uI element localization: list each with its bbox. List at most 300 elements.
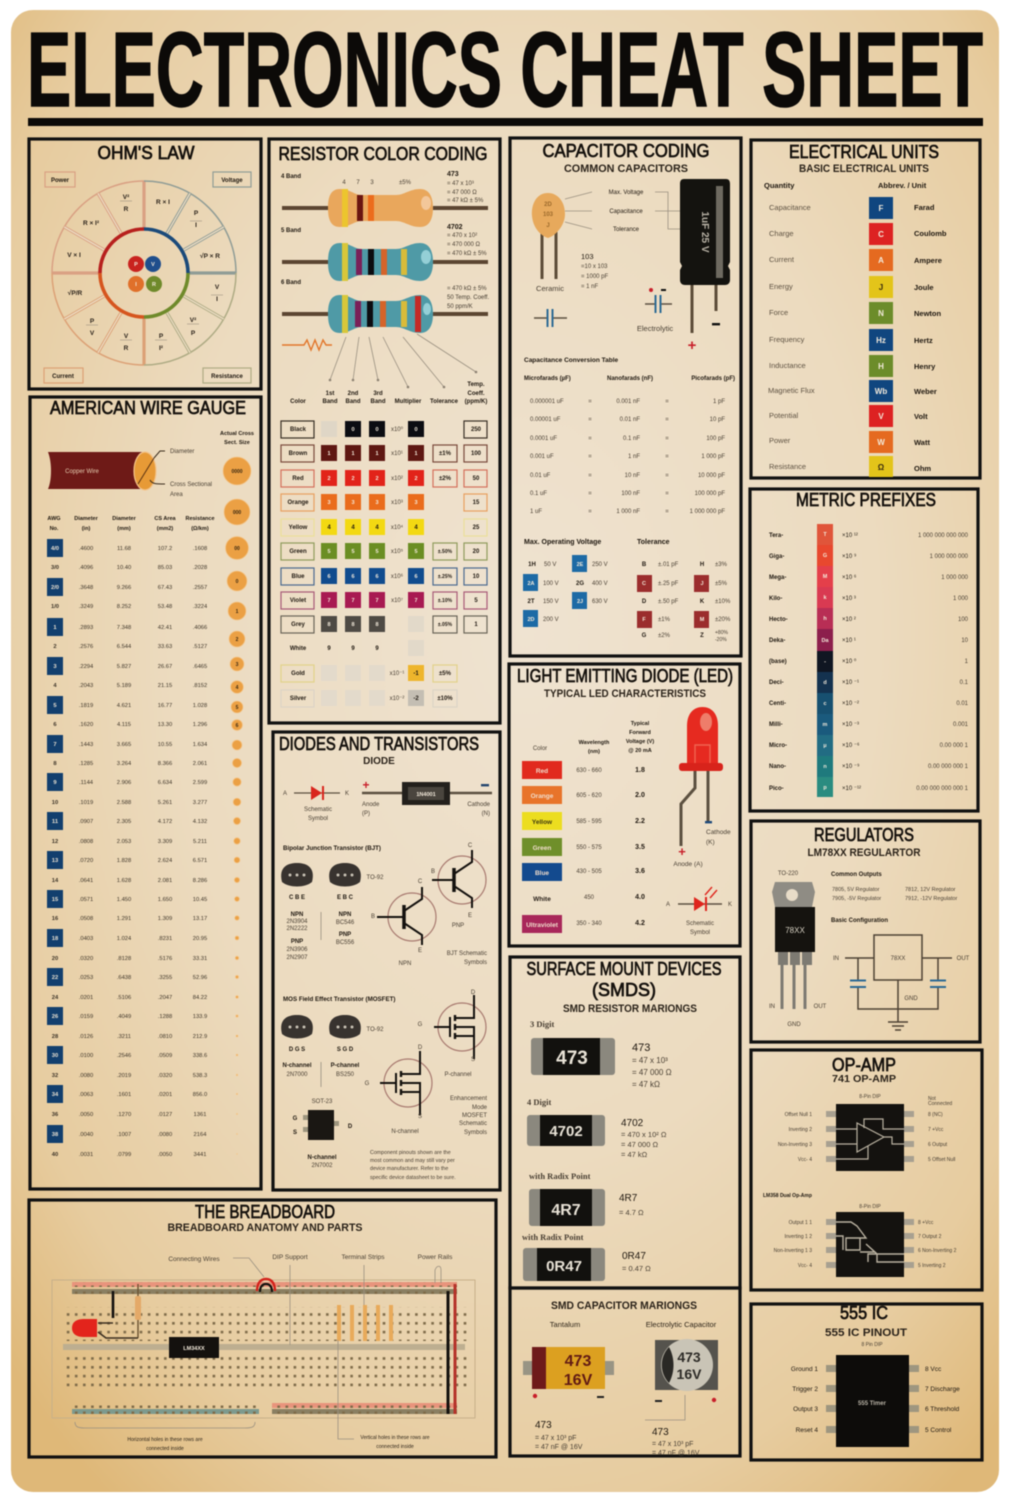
tolerance codes: -20% xyxy=(715,637,727,643)
gauge table: .6438 xyxy=(117,975,131,981)
741 pin labels: Vcc- 4 xyxy=(798,1157,812,1163)
diode component: 1N4001 xyxy=(416,792,436,798)
max operating voltage: 50 V xyxy=(544,562,556,568)
SMD radix 4R7: with Radix Point xyxy=(529,1171,591,1181)
gauge table: .0509 xyxy=(158,1053,172,1059)
resistor: 6 band xyxy=(281,280,488,333)
tantalum capacitor: 473 xyxy=(565,1353,591,1370)
panel: resistor color coding xyxy=(269,139,500,723)
color code table: 6 xyxy=(327,574,331,580)
actual cross-section circles: 0000 xyxy=(231,469,243,475)
LED table headers: Wavelength xyxy=(579,740,610,746)
formulas: I xyxy=(216,296,218,303)
tantalum capacitor: 473 xyxy=(535,1420,552,1431)
gauge table: 22 xyxy=(52,975,58,981)
MOSFET packages xyxy=(281,1015,384,1087)
color code table: 0 xyxy=(375,427,379,433)
capacitance conversion table: 0.01 uF xyxy=(530,473,551,479)
breadboard notes: Vertical holes in these rows are xyxy=(360,1435,430,1441)
tolerance codes: Tolerance xyxy=(637,539,670,546)
gauge table: 24 xyxy=(52,995,59,1001)
prefix colour strip: k xyxy=(823,595,827,601)
wire illustration: Cross Sectional xyxy=(170,482,212,488)
decimal values: 0.1 xyxy=(960,680,969,686)
diode symbol: K xyxy=(345,791,349,797)
subheading: TYPICAL LED CHARACTERISTICS xyxy=(544,688,706,700)
unit names: Farad xyxy=(914,203,935,212)
resistor: 4 band: ±5% xyxy=(399,180,412,186)
table headers: CS Area xyxy=(154,516,177,522)
regulator circuit xyxy=(833,935,970,1030)
formulas: V × I xyxy=(67,252,81,259)
SMD radix 4R7 xyxy=(529,1171,644,1226)
electrolytic capacitor: + xyxy=(688,337,697,354)
prefix names: Pico- xyxy=(769,786,784,792)
gauge table: 5.189 xyxy=(117,683,131,689)
color code table: Violet xyxy=(290,598,306,604)
panel: SMD capacitor markings xyxy=(510,1288,740,1457)
SMD radix 4R7: 4R7 xyxy=(551,1202,581,1219)
741 pin labels: Connected xyxy=(928,1101,952,1107)
gauge table: .3224 xyxy=(193,604,208,610)
gauge table: .1601 xyxy=(117,1092,131,1098)
gauge table: 4.172 xyxy=(158,819,172,825)
regulator circuit: IN xyxy=(833,956,839,962)
color code table: ±2% xyxy=(439,476,452,482)
gauge table: 38 xyxy=(52,1132,59,1138)
LED table headers: Forward xyxy=(629,730,651,736)
max operating voltage: 250 V xyxy=(592,562,608,568)
prefix names: Giga- xyxy=(769,554,784,560)
gauge table: .0508 xyxy=(79,916,93,922)
common outputs text: Common Outputs xyxy=(831,872,882,878)
max operating voltage: 2T xyxy=(527,599,535,605)
LM358 pin labels: Inverting 1 2 xyxy=(784,1234,812,1240)
electrolytic SMD capacitor: 16V xyxy=(677,1366,702,1382)
color code table: Gold xyxy=(291,671,305,677)
color code table: -2 xyxy=(413,696,419,702)
gauge table: 4.132 xyxy=(193,819,207,825)
common outputs text xyxy=(831,872,957,924)
table headers: AWG xyxy=(47,516,61,522)
LED colour table: 4.2 xyxy=(635,920,645,927)
tolerance codes: ±2% xyxy=(658,633,671,639)
LED colour table: 550 - 575 xyxy=(576,845,602,851)
LED table headers xyxy=(533,721,654,755)
SMD 3 digit: 473 xyxy=(556,1048,588,1069)
MOSFET P-channel symbol xyxy=(434,995,486,1059)
BJT captions: C xyxy=(418,879,423,885)
resistor: 5 band xyxy=(281,228,488,281)
heading: LED: LIGHT EMITTING DIODE (LED) xyxy=(517,666,733,686)
TO-220 regulator: 78XX xyxy=(785,926,805,935)
electrolytic SMD capacitor xyxy=(645,1320,718,1457)
capacitance conversion table: = xyxy=(588,454,592,460)
LED colour table: Red xyxy=(536,768,548,775)
gauge table: .0907 xyxy=(79,819,93,825)
value notes: = 470 kΩ ± 5% xyxy=(447,286,487,292)
TO-220 regulator: OUT xyxy=(814,1004,827,1010)
resistor: 4 band: 7 xyxy=(356,180,360,186)
powers of ten: ×10 ⁰ xyxy=(842,658,857,665)
gauge table: 13.30 xyxy=(158,722,172,728)
unit colour boxes: F xyxy=(879,204,884,213)
gauge table: 2.053 xyxy=(117,839,131,845)
decimal values: 1 000 xyxy=(953,596,969,602)
value notes: 50 ppm/K xyxy=(447,304,473,310)
table headers: (ppm/K) xyxy=(465,399,487,405)
gauge table: 1 xyxy=(53,625,57,631)
decimal values: 0.00 000 000 1 xyxy=(928,764,969,770)
gauge table: 1.024 xyxy=(117,936,132,942)
color code table: ±1% xyxy=(439,451,452,457)
diode symbol: A xyxy=(283,791,287,797)
SOT-23 package: G xyxy=(293,1116,298,1122)
tantalum capacitor: = 47 nF @ 16V xyxy=(535,1444,583,1451)
color code table: 5 xyxy=(375,549,379,555)
regulator circuit: OUT xyxy=(957,956,970,962)
electrolytic SMD capacitor: 473 xyxy=(677,1349,701,1365)
prefix names: Milli- xyxy=(769,722,783,728)
panel: LED xyxy=(509,664,740,946)
tolerance codes: +80% xyxy=(715,630,728,636)
gauge table: 13 xyxy=(52,858,59,864)
unit colour boxes: C xyxy=(878,230,884,239)
gauge table: .0720 xyxy=(79,858,93,864)
wire illustration: Area xyxy=(170,492,183,498)
gauge table: .1144 xyxy=(79,780,94,786)
callout labels xyxy=(565,190,682,233)
column headers xyxy=(764,181,927,190)
breadboard diagram: LM34XX xyxy=(183,1346,205,1352)
value notes: = 47 x 10³ xyxy=(447,181,474,187)
capacitance conversion table: = xyxy=(665,509,669,515)
gauge table: 6.571 xyxy=(193,858,207,864)
gauge table: 8.252 xyxy=(117,604,131,610)
ceramic capacitor: J xyxy=(546,223,550,229)
wheel chart xyxy=(52,181,236,365)
unit colour boxes: W xyxy=(877,438,885,447)
gauge table: 7.348 xyxy=(117,625,131,631)
prefix names: Deka- xyxy=(769,638,785,644)
actual cross-section circles: 1 xyxy=(236,609,239,615)
color code table: x10⁵ xyxy=(391,548,404,555)
color code table: Orange xyxy=(287,500,309,506)
SMD 4 digit: = 47 000 Ω xyxy=(621,1140,658,1149)
color code table: x10⁴ xyxy=(391,524,404,531)
capacitance conversion table: 10 pF xyxy=(710,417,725,423)
gauge table: .0126 xyxy=(79,1034,93,1040)
741 chip xyxy=(826,1094,914,1171)
tantalum capacitor: = 47 x 10³ pF xyxy=(535,1435,576,1442)
color code table: 7 xyxy=(375,598,379,604)
powers of ten: ×10 ⁻⁶ xyxy=(842,742,860,749)
regulator circuit: GND xyxy=(904,996,918,1002)
color code table: 3 xyxy=(414,500,418,506)
subheading: BASIC ELECTRICAL UNITS xyxy=(799,163,929,175)
prefix names: Kilo- xyxy=(769,596,782,602)
MOSFET captions: D xyxy=(418,1045,423,1051)
MOSFET captions: Mode xyxy=(472,1105,488,1111)
gauge table: 2.588 xyxy=(117,800,131,806)
SOT-23 package: N-channel xyxy=(307,1155,337,1161)
formulas: R xyxy=(124,206,129,213)
tolerance codes: J xyxy=(700,581,704,587)
LED schematic symbol: Symbol xyxy=(690,930,710,936)
red LED illustration xyxy=(673,707,731,868)
LED colour table: 2.2 xyxy=(635,818,645,825)
BJT packages: BC546 xyxy=(336,920,355,926)
subheading: 741 OP-AMP xyxy=(832,1074,896,1085)
formulas: P xyxy=(191,330,196,337)
LED table headers: Color xyxy=(533,746,547,752)
formulas: V² xyxy=(190,317,197,324)
gauge table: .0201 xyxy=(158,1092,172,1098)
max operating voltage: 2E xyxy=(577,562,584,568)
BJT packages: 2N2907 xyxy=(286,955,308,961)
MOSFET packages: N-channel xyxy=(282,1063,312,1069)
color code table: 0 xyxy=(351,427,355,433)
quantity labels: Energy xyxy=(769,282,793,291)
BJT captions: Symbols xyxy=(464,960,487,966)
SMD radix 0R47: 0R47 xyxy=(622,1251,646,1262)
BJT packages: 2N2222 xyxy=(286,926,308,932)
actual cross-section circles: 4 xyxy=(236,685,239,691)
LED colour table: 450 xyxy=(584,895,595,901)
555 pin labels: Output 3 xyxy=(793,1406,818,1413)
SOT-23 package: SOT-23 xyxy=(312,1099,333,1105)
color code table: 8 xyxy=(327,622,331,628)
value notes: = 470 kΩ ± 5% xyxy=(447,251,487,257)
gauge table xyxy=(51,546,208,1158)
powers of ten: ×10 ⁹ xyxy=(842,553,857,560)
color code table: 6 xyxy=(375,574,379,580)
tolerance codes: ±1% xyxy=(658,617,671,623)
gauge table: 2.081 xyxy=(158,878,172,884)
BJT captions: NPN xyxy=(399,961,411,967)
tolerance codes: M xyxy=(700,617,705,623)
prefix colour strip: Da xyxy=(821,638,829,644)
breadboard diagram xyxy=(52,1279,475,1418)
gauge table: 53.48 xyxy=(158,604,172,610)
note: device manufacturer. Refer to the xyxy=(370,1166,448,1172)
gauge table: .2047 xyxy=(158,995,172,1001)
SOT-23 package: 2N7002 xyxy=(311,1163,333,1169)
prefix names: Tera- xyxy=(769,533,783,539)
gauge table: 1.628 xyxy=(117,878,131,884)
panel: diodes and transistors xyxy=(273,732,500,1190)
gauge table: .1620 xyxy=(79,722,93,728)
gauge table: .2028 xyxy=(193,565,207,571)
gauge number boxes xyxy=(47,539,63,1143)
color code table: Grey xyxy=(291,622,305,628)
MOSFET captions: Symbols xyxy=(464,1130,487,1136)
color code table: ±.50% xyxy=(438,549,453,555)
gauge table: 10.40 xyxy=(117,565,131,571)
max operating voltage: 2D xyxy=(527,617,535,623)
gauge table: .0810 xyxy=(158,1034,172,1040)
gauge table: 33.31 xyxy=(193,956,207,962)
breadboard notes: connected inside xyxy=(146,1446,184,1452)
subheading: diode: DIODE xyxy=(363,756,395,767)
capacitance conversion table: 0.000001 uF xyxy=(530,399,564,405)
note xyxy=(370,1150,456,1181)
gauge table: 1.634 xyxy=(193,742,208,748)
LM358 pin labels: 8 +Vcc xyxy=(918,1220,934,1226)
actual cross-section circles: 2 xyxy=(236,637,239,643)
gauge table: .1608 xyxy=(193,546,207,552)
prefix colour strip xyxy=(817,524,833,797)
gauge table: 1.028 xyxy=(193,703,207,709)
note: specific device datasheet to be sure. xyxy=(370,1175,456,1181)
gauge table: 11 xyxy=(52,819,59,825)
max operating voltage: 100 V xyxy=(543,581,559,587)
LED colour table: Green xyxy=(533,845,551,852)
LED colour table xyxy=(522,761,645,933)
color code table: 4 xyxy=(327,525,331,531)
gauge table: .0100 xyxy=(79,1053,93,1059)
max operating voltage xyxy=(523,539,608,627)
part labels: DIP Support xyxy=(272,1254,308,1261)
capacitance conversion table: Capacitance Conversion Table xyxy=(524,357,619,364)
max operating voltage: 2J xyxy=(577,599,583,605)
formula dots: I xyxy=(135,282,137,288)
tolerance codes: ±10% xyxy=(715,599,731,605)
LED colour table: 630 - 660 xyxy=(576,768,602,774)
gauge table: 84.22 xyxy=(193,995,207,1001)
value notes: 473 xyxy=(447,171,459,178)
max operating voltage: 630 V xyxy=(592,599,608,605)
prefix names: Mega- xyxy=(769,575,786,581)
table headers: Diameter xyxy=(74,516,99,522)
prefix colour strip: µ xyxy=(823,743,827,749)
gauge table: 30 xyxy=(52,1053,58,1059)
value notes: = 47 kΩ ± 5% xyxy=(447,198,484,204)
unit colour boxes: V xyxy=(878,412,884,421)
tolerance codes: F xyxy=(642,617,646,623)
gauge table: 3.665 xyxy=(117,742,131,748)
capacitance conversion table: = xyxy=(665,491,669,497)
SMD 3 digit: = 47 kΩ xyxy=(632,1080,660,1089)
leader lines xyxy=(75,1258,441,1439)
SMD radix 0R47 xyxy=(522,1232,651,1281)
gauge table: 3441 xyxy=(194,1152,206,1158)
gauge table: 20.95 xyxy=(193,936,207,942)
MOSFET captions: G xyxy=(365,1081,370,1087)
BJT PNP symbol xyxy=(432,850,486,908)
capacitance conversion table: 100 000 pF xyxy=(695,491,725,497)
gauge table: .0320 xyxy=(158,1073,172,1079)
unit names: Ohm xyxy=(914,464,931,473)
ceramic capacitor: 103 xyxy=(543,212,554,218)
color code table: 5 xyxy=(327,549,331,555)
max operating voltage: 1H xyxy=(528,562,536,568)
MOSFET captions: P-channel xyxy=(444,1072,472,1078)
BJT packages: PNP xyxy=(291,939,303,945)
gauge table: 1.309 xyxy=(158,916,172,922)
part labels: Terminal Strips xyxy=(342,1254,385,1261)
heading: op-amp: OP-AMP xyxy=(832,1055,896,1075)
capacitance conversion table: = xyxy=(665,417,669,423)
formulas: P xyxy=(194,210,199,217)
BJT captions: E xyxy=(418,948,422,954)
formulas: P xyxy=(159,333,164,340)
gauge table: .1270 xyxy=(117,1112,131,1118)
tantalum capacitor: Tantalum xyxy=(550,1320,580,1329)
gauge table: 8 xyxy=(53,761,57,767)
tolerance codes: ±20% xyxy=(715,617,731,623)
common outputs text: 7905, -5V Regulator xyxy=(832,896,881,902)
gauge table: 85.03 xyxy=(158,565,172,571)
capacitance conversion table: 0.1 nF xyxy=(623,436,640,442)
tolerance codes: H xyxy=(700,562,704,568)
color code table: Green xyxy=(289,549,307,555)
gauge table: .1443 xyxy=(79,742,93,748)
gauge table: .0080 xyxy=(158,1132,172,1138)
gauge table: .0253 xyxy=(79,975,93,981)
LED schematic symbol xyxy=(666,887,732,936)
capacitance conversion table: = xyxy=(665,436,669,442)
741 pin labels: Not xyxy=(928,1096,936,1102)
red LED illustration: (K) xyxy=(706,839,715,846)
color code table: 2 xyxy=(351,476,355,482)
gauge table: 4 xyxy=(53,683,57,689)
quantity labels: Charge xyxy=(769,229,794,238)
breadboard notes: connected inside xyxy=(376,1444,414,1450)
MOSFET captions: S xyxy=(418,1114,422,1120)
LM358 pin labels: 6 Non-Inverting 2 xyxy=(918,1248,957,1254)
gauge table: 5.827 xyxy=(117,664,131,670)
741 pin labels: 5 Offset Null xyxy=(928,1157,955,1163)
LED colour table: 4.0 xyxy=(635,894,645,901)
SMD 4 digit: 4702 xyxy=(621,1118,644,1129)
note: most common and may still vary per xyxy=(370,1158,455,1164)
gauge table: 67.43 xyxy=(158,585,172,591)
SOT-23 package xyxy=(293,1099,353,1169)
value notes xyxy=(447,171,489,310)
SMD radix 4R7: = 4.7 Ω xyxy=(619,1208,644,1217)
gauge table: 2.624 xyxy=(158,858,173,864)
741 pin labels: 7 +Vcc xyxy=(928,1127,944,1133)
gauge table: 42.41 xyxy=(158,625,172,631)
gauge table: 52.96 xyxy=(193,975,207,981)
LED colour table: Ultraviolet xyxy=(526,922,559,929)
max operating voltage: 200 V xyxy=(543,617,559,623)
color code table: 7 xyxy=(327,598,331,604)
heading: regulators: REGULATORS xyxy=(814,825,914,845)
value notes: 4702 xyxy=(447,224,463,231)
gauge table: 856.0 xyxy=(193,1092,207,1098)
part labels xyxy=(168,1254,453,1263)
color code table: ±.10% xyxy=(438,598,453,604)
BJT packages: BC556 xyxy=(336,940,355,946)
gauge table: .0050 xyxy=(79,1112,93,1118)
capacitance conversion table: 1 nF xyxy=(628,454,640,460)
color code table: x10¹ xyxy=(391,451,403,457)
LED colour table: 3.6 xyxy=(635,868,645,875)
decimal values: 0.01 xyxy=(956,701,969,707)
color code table: ±.25% xyxy=(438,574,453,580)
LED colour table: White xyxy=(533,896,551,903)
gauge table: 5.211 xyxy=(193,839,207,845)
table headers: 3rd xyxy=(373,391,383,397)
heading: SMDs: SURFACE MOUNT DEVICES xyxy=(526,959,722,979)
capacitance conversion table: Picofarads (pF) xyxy=(691,376,735,382)
prefix colour strip: - xyxy=(824,659,826,665)
heading: SMD capacitor markings: SMD CAPACITOR MARIONGS xyxy=(551,1300,697,1312)
gauge table: 20 xyxy=(52,956,58,962)
LED colour table: 3.5 xyxy=(635,844,645,851)
